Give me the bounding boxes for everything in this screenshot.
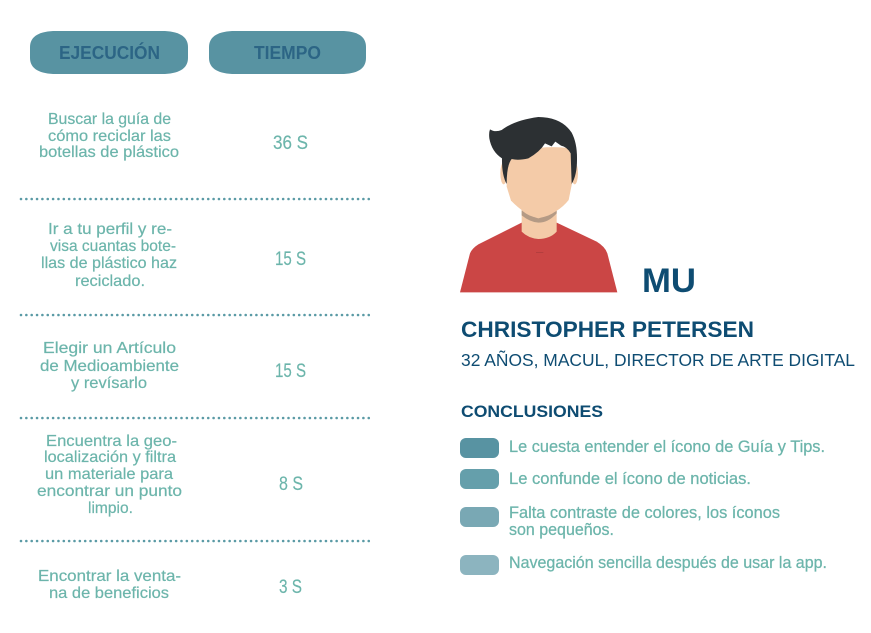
row 1 task: cómo reciclar las (48, 128, 171, 145)
conclusions heading: CONCLUSIONES (461, 402, 603, 421)
persona details: 32 AÑOS, MACUL, DIRECTOR DE ARTE DIGITAL (461, 349, 855, 370)
conclusion 4: Navegación sencilla después de usar la app. (509, 554, 827, 572)
header pill: TIEMPO: TIEMPO (254, 43, 321, 63)
row 3 task: de Medioambiente (40, 358, 179, 375)
row 4 task (37, 433, 182, 517)
persona name: CHRISTOPHER PETERSEN (461, 317, 754, 342)
row 4 task: limpio. (88, 500, 133, 517)
row 4 task: encontrar un punto (37, 483, 182, 500)
row 5 task: na de beneficios (49, 585, 169, 602)
conclusion 3 (460, 504, 780, 539)
row 5 task (38, 568, 181, 602)
row 2 task: reciclado. (75, 273, 145, 290)
row 2 time: 15 S (275, 249, 306, 270)
conclusion 3: son pequeños. (509, 521, 614, 539)
row 3 time: 15 S (275, 361, 306, 382)
header pill: EJECUCIÓN (30, 31, 188, 74)
row 4 task: un materiale para (45, 466, 173, 483)
row 2 task (41, 221, 177, 290)
row 3 task (40, 340, 179, 392)
row 2 task: visa cuantas bote- (50, 238, 176, 255)
conclusion 3: Falta contraste de colores, los íconos (509, 504, 780, 522)
row 2 task: Ir a tu perfil y re- (48, 221, 172, 238)
row 5 task: Encontrar la venta- (38, 568, 181, 585)
header pill: EJECUCIÓN: EJECUCIÓN (59, 42, 160, 63)
row 3 task: y revísarlo (71, 375, 147, 392)
row 1 time: 36 S (273, 133, 308, 154)
header pill: TIEMPO (209, 31, 366, 74)
row 2 task: llas de plástico haz (41, 255, 177, 272)
row 4 time: 8 S (279, 474, 303, 495)
avatar illustration (460, 117, 617, 292)
conclusion 1: Le cuesta entender el ícono de Guía y Tips. (509, 438, 825, 456)
row 3 task: Elegir un Artículo (43, 340, 176, 357)
row 1 task: Buscar la guía de (48, 111, 171, 128)
row 1 task (39, 111, 179, 161)
row 1 task: botellas de plástico (39, 144, 179, 161)
row 4 task: localización y filtra (44, 449, 176, 466)
persona code MU: MU (642, 262, 696, 300)
row 4 task: Encuentra la geo- (46, 433, 177, 450)
conclusion 2: Le confunde el ícono de noticias. (509, 470, 751, 488)
row 5 time: 3 S (279, 577, 302, 598)
